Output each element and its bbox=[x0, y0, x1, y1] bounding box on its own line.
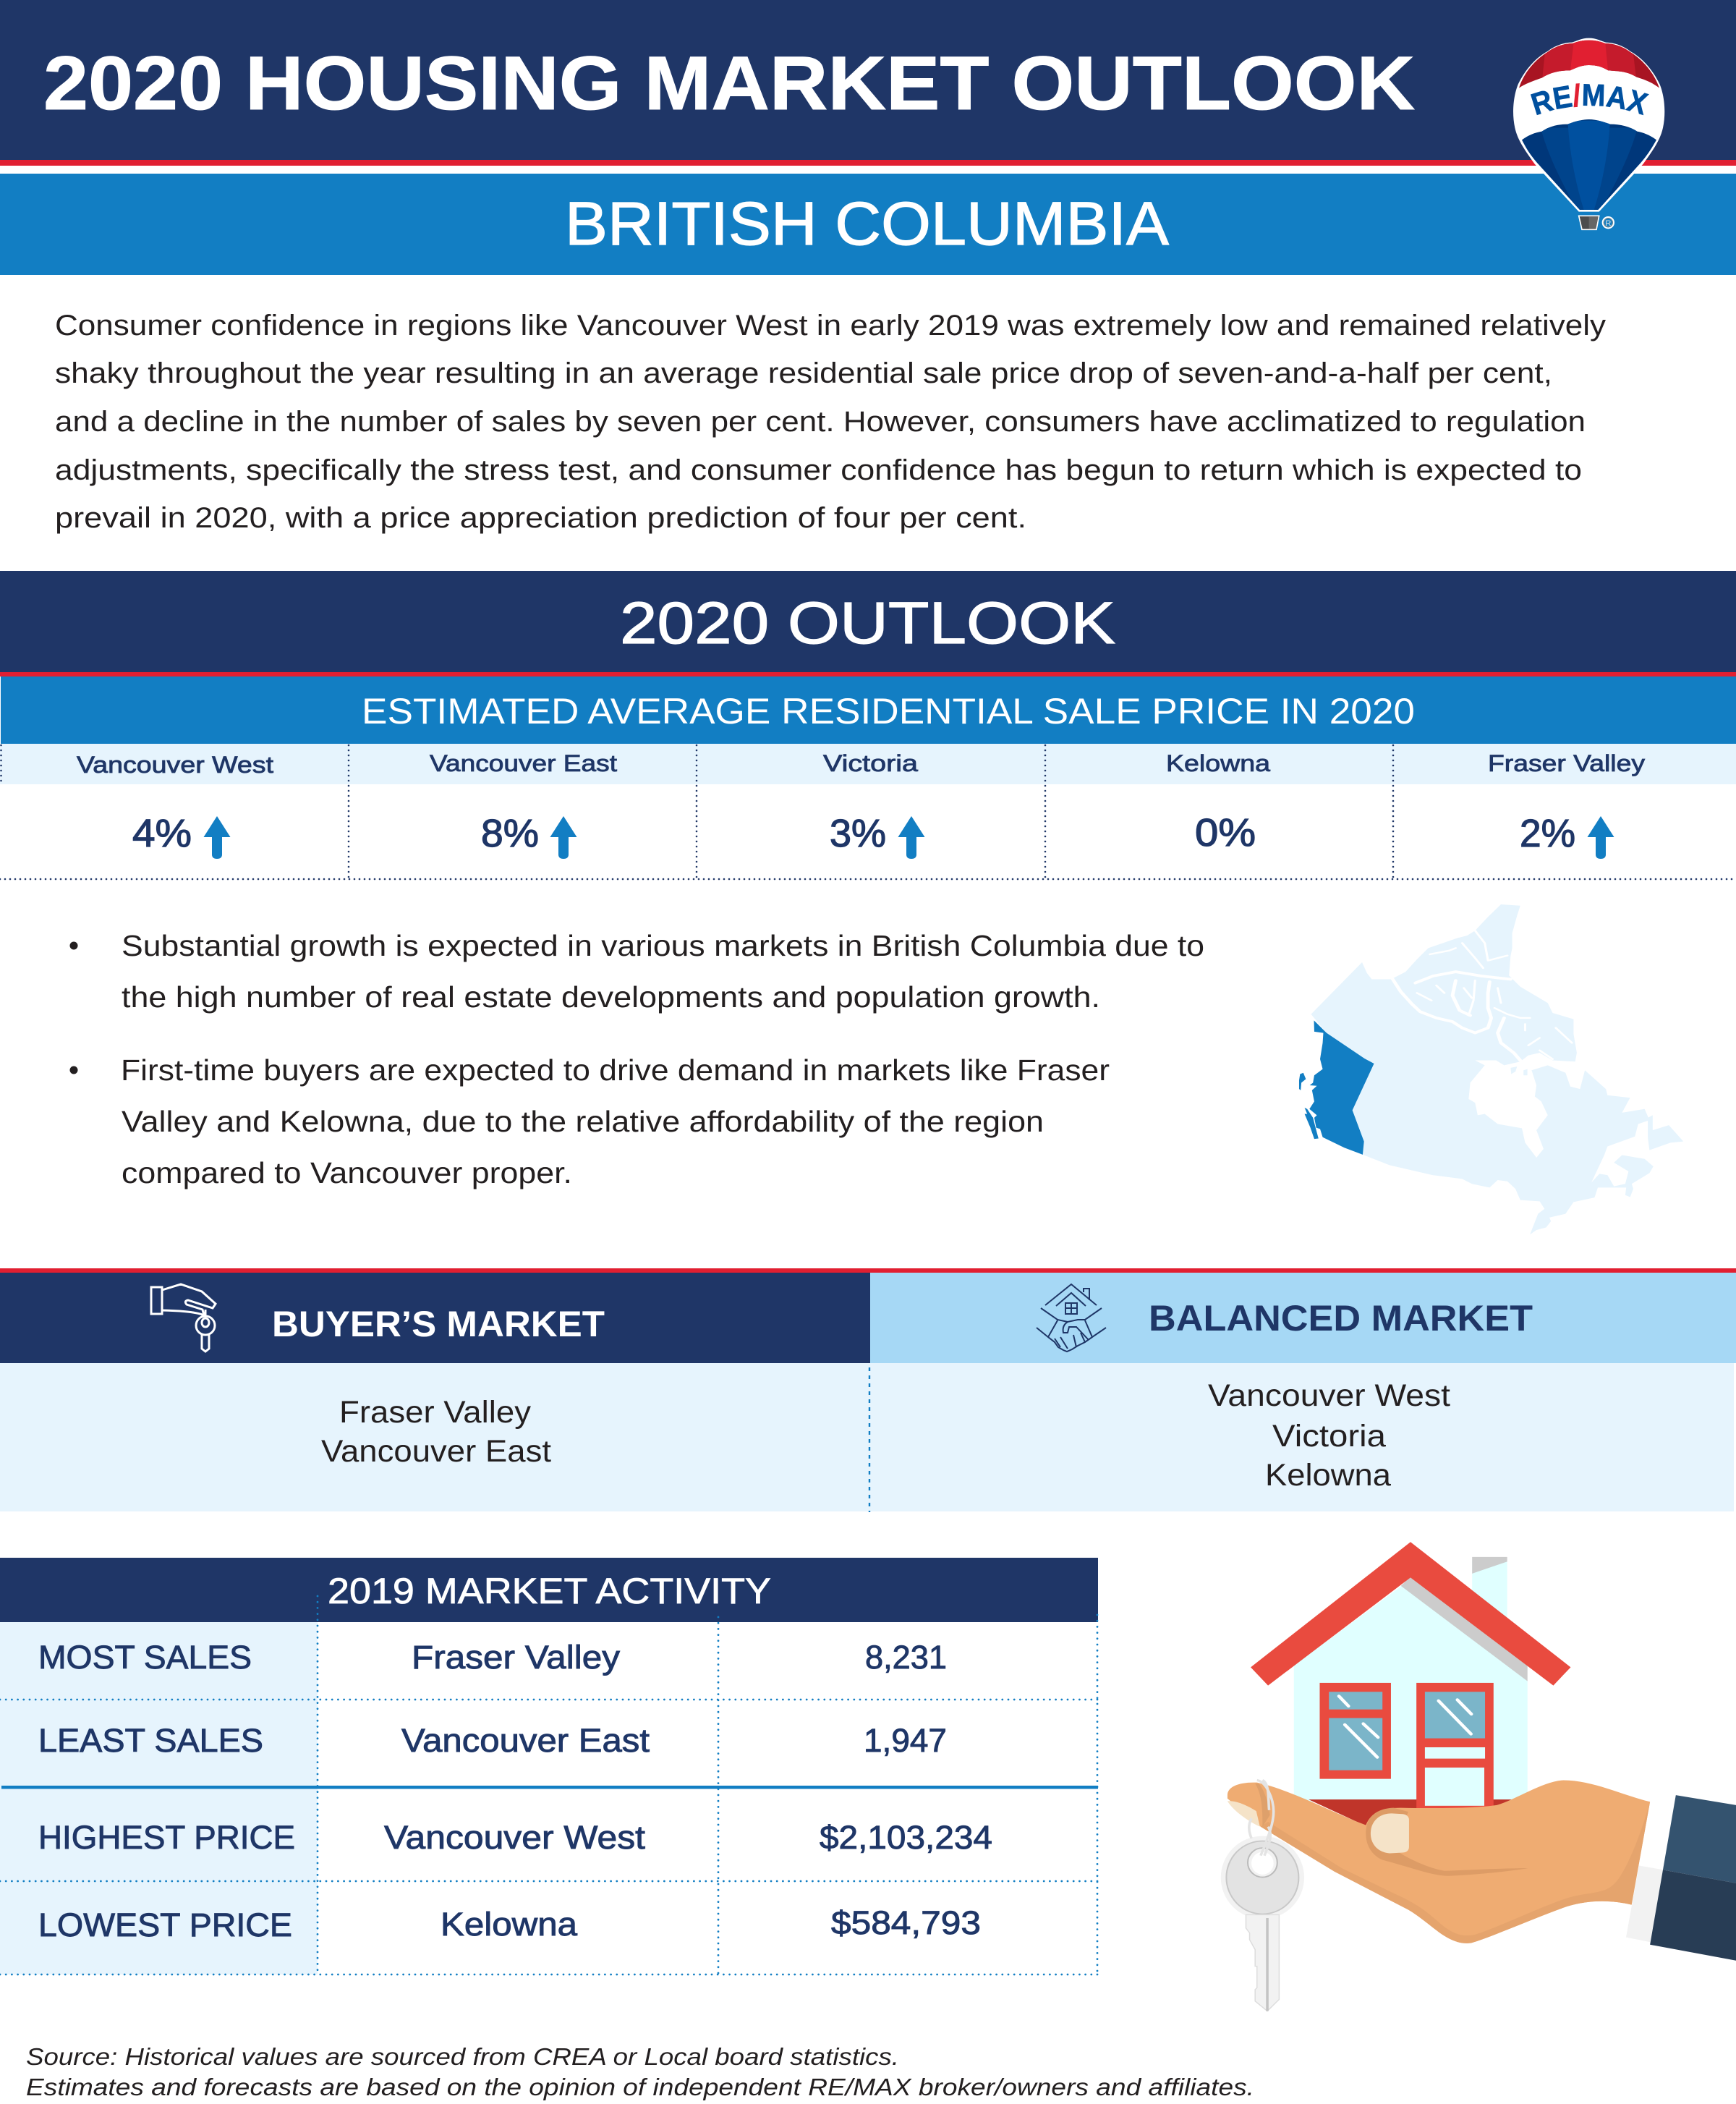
icon: house bbox=[1251, 1542, 1570, 1832]
icon: house and handshake bbox=[1037, 1284, 1106, 1352]
row: least sales bbox=[38, 1722, 947, 1759]
column: Kelowna: 0% bbox=[1195, 811, 1256, 854]
icon: hand holding key bbox=[151, 1284, 216, 1352]
bullet list: compared to Vancouver proper. bbox=[122, 1156, 572, 1189]
row: least sales: LEAST SALES bbox=[38, 1722, 263, 1759]
title: 2020 HOUSING MARKET OUTLOOK bbox=[43, 41, 1415, 126]
column: Vancouver East: 8% bbox=[481, 812, 539, 855]
column: Victoria: Victoria bbox=[823, 750, 918, 776]
icon: hand bbox=[1227, 1780, 1650, 1943]
column: Fraser Valley: Fraser Valley bbox=[1488, 750, 1645, 776]
row: highest price: Vancouver West bbox=[384, 1819, 646, 1856]
row: most sales: 8,231 bbox=[865, 1639, 947, 1676]
column: Vancouver East: Vancouver East bbox=[430, 750, 617, 776]
intro paragraph: and a decline in the number of sales by seven per cent. However, consumers have acclimatized to regulation bbox=[55, 406, 1586, 438]
bullet list: Substantial growth is expected in various markets in British Columbia due to bbox=[122, 929, 1204, 962]
row: most sales: MOST SALES bbox=[38, 1639, 252, 1676]
intro paragraph: Consumer confidence in regions like Vancouver West in early 2019 was extremely low and remained relatively bbox=[55, 310, 1606, 342]
heading: BALANCED MARKET bbox=[1149, 1298, 1533, 1339]
panel: buyer's market bbox=[0, 1273, 870, 1511]
panel: price estimates bbox=[0, 676, 1736, 879]
column: Fraser Valley: 2% bbox=[1520, 812, 1575, 855]
intro paragraph: shaky throughout the year resulting in an average residential sale price drop of seven-and-a-half per cent, bbox=[55, 357, 1552, 389]
row: lowest price: Kelowna bbox=[441, 1906, 578, 1943]
row: most sales: Fraser Valley bbox=[412, 1639, 621, 1676]
source note: Source: Historical values are sourced from CREA or Local board statistics. bbox=[26, 2043, 899, 2070]
column: Kelowna: Kelowna bbox=[1166, 750, 1270, 776]
bullet list: First-time buyers are expected to drive demand in markets like Fraser bbox=[121, 1053, 1110, 1087]
panel: balanced market bbox=[870, 1273, 1736, 1511]
heading: BUYER’S MARKET bbox=[272, 1304, 605, 1344]
row: highest price bbox=[38, 1819, 992, 1856]
logo wordmark: RE/MAX bbox=[1531, 83, 1649, 116]
section banner: 2020 outlook bbox=[0, 571, 1736, 676]
section banner: 2020 outlook: 2020 OUTLOOK bbox=[620, 590, 1115, 656]
table: 2019 market activity bbox=[0, 1558, 1098, 1974]
market list: Vancouver East bbox=[321, 1434, 551, 1469]
icon: key bbox=[1221, 1780, 1304, 2011]
market list: Kelowna bbox=[1265, 1458, 1391, 1493]
column: Fraser Valley bbox=[1488, 750, 1645, 859]
highlighted province: British Columbia bbox=[1299, 1020, 1374, 1155]
column: Victoria: 3% bbox=[830, 812, 886, 855]
column: Victoria bbox=[823, 750, 924, 859]
market list bbox=[321, 1395, 551, 1469]
logo: RE/MAX balloon bbox=[1513, 38, 1665, 230]
market list: Fraser Valley bbox=[339, 1395, 532, 1430]
row: highest price: $2,103,234 bbox=[820, 1819, 992, 1856]
intro paragraph bbox=[55, 310, 1606, 534]
bullet list: the high number of real estate developments and population growth. bbox=[122, 980, 1100, 1014]
icon: shirt cuff and sleeve bbox=[1626, 1795, 1736, 1961]
column: Vancouver East bbox=[430, 750, 617, 859]
intro paragraph: adjustments, specifically the stress test, and consumer confidence has begun to return which is expected to bbox=[55, 454, 1582, 486]
divider: market band bbox=[0, 1268, 1736, 1273]
column: Kelowna bbox=[1166, 750, 1270, 854]
row: lowest price: $584,793 bbox=[831, 1904, 981, 1941]
row: lowest price: LOWEST PRICE bbox=[38, 1906, 292, 1943]
row: highest price: HIGHEST PRICE bbox=[38, 1819, 295, 1856]
row: most sales bbox=[38, 1639, 947, 1676]
row: least sales: 1,947 bbox=[864, 1722, 947, 1759]
row: least sales: Vancouver East bbox=[401, 1722, 650, 1759]
bullet list: Valley and Kelowna, due to the relative affordability of the region bbox=[122, 1105, 1044, 1138]
column: Vancouver West: Vancouver West bbox=[77, 752, 273, 778]
row: lowest price bbox=[38, 1904, 981, 1943]
bullet list bbox=[69, 929, 1204, 1189]
illustration: hand holding house and key bbox=[1221, 1542, 1736, 2011]
source note bbox=[26, 2043, 1254, 2100]
logo: RE/MAX balloon: R bbox=[1605, 219, 1611, 228]
market list bbox=[1208, 1378, 1450, 1493]
market list: Vancouver West bbox=[1208, 1378, 1450, 1413]
source note: Estimates and forecasts are based on the opinion of independent RE/MAX broker/owners and affiliates. bbox=[26, 2074, 1254, 2100]
column: Vancouver West bbox=[77, 752, 273, 859]
subtitle: region: BRITISH COLUMBIA bbox=[565, 190, 1169, 258]
panel heading: ESTIMATED AVERAGE RESIDENTIAL SALE PRICE IN 2020 bbox=[362, 691, 1415, 731]
map of Canada with British Columbia highlighted bbox=[1299, 904, 1683, 1234]
intro paragraph: prevail in 2020, with a price appreciation prediction of four per cent. bbox=[55, 502, 1026, 534]
market list: Victoria bbox=[1272, 1419, 1386, 1454]
table heading: 2019 MARKET ACTIVITY bbox=[328, 1571, 771, 1611]
header banner bbox=[0, 0, 1736, 275]
column: Vancouver West: 4% bbox=[132, 812, 192, 855]
